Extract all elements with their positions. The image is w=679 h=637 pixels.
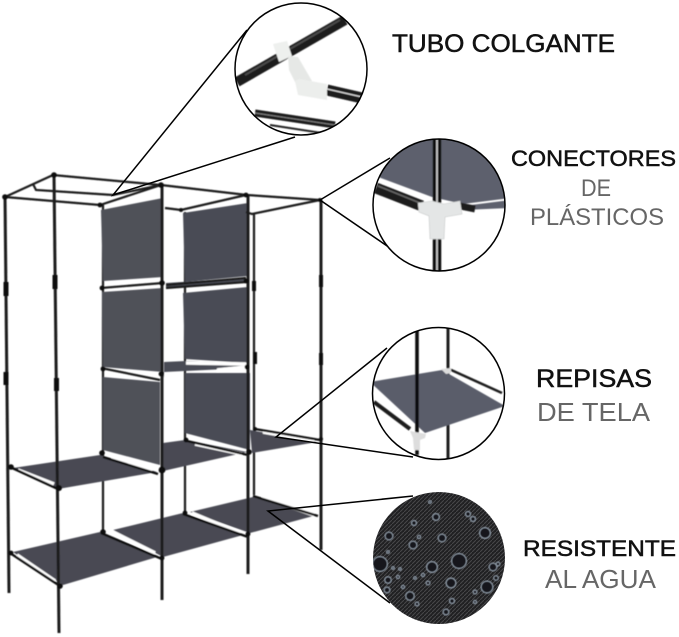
top frame [5, 175, 320, 382]
shelf side strips [17, 432, 314, 581]
label: repisas de tela: REPISAS [536, 365, 652, 393]
detail circle: waterproof fabric [372, 492, 505, 624]
label: repisas de tela [536, 365, 652, 427]
narrow upper shelves [164, 278, 247, 372]
label: repisas de tela: DE TELA [537, 397, 651, 427]
label: conectores de plásticos: CONECTORES [511, 146, 676, 171]
fabric panels, left column [101, 198, 163, 465]
label: resistente al agua [523, 536, 676, 594]
label: conectores de plásticos [511, 146, 676, 231]
detail circle: hanging rod [235, 3, 367, 135]
storage rack [2, 172, 323, 633]
label: conectores de plásticos: DE [581, 175, 611, 202]
shelf side rods [10, 429, 320, 586]
callout lines [113, 30, 413, 603]
label: resistente al agua: RESISTENTE [523, 536, 676, 561]
rear legs [103, 205, 254, 530]
front legs [5, 175, 321, 633]
white gaps under the upper shelves [186, 363, 246, 370]
label: tubo colgante: TUBO COLGANTE [392, 30, 615, 58]
water droplets [372, 501, 500, 615]
label: resistente al agua: AL AGUA [545, 564, 657, 594]
lower shelves, fabric [13, 430, 317, 585]
detail circle: fabric shelf [370, 325, 505, 462]
detail circle: plastic connector [370, 135, 510, 275]
label: conectores de plásticos: PLÁSTICOS [530, 204, 664, 231]
leg sleeves and connectors [2, 172, 323, 589]
fabric panels, right column [183, 203, 250, 450]
